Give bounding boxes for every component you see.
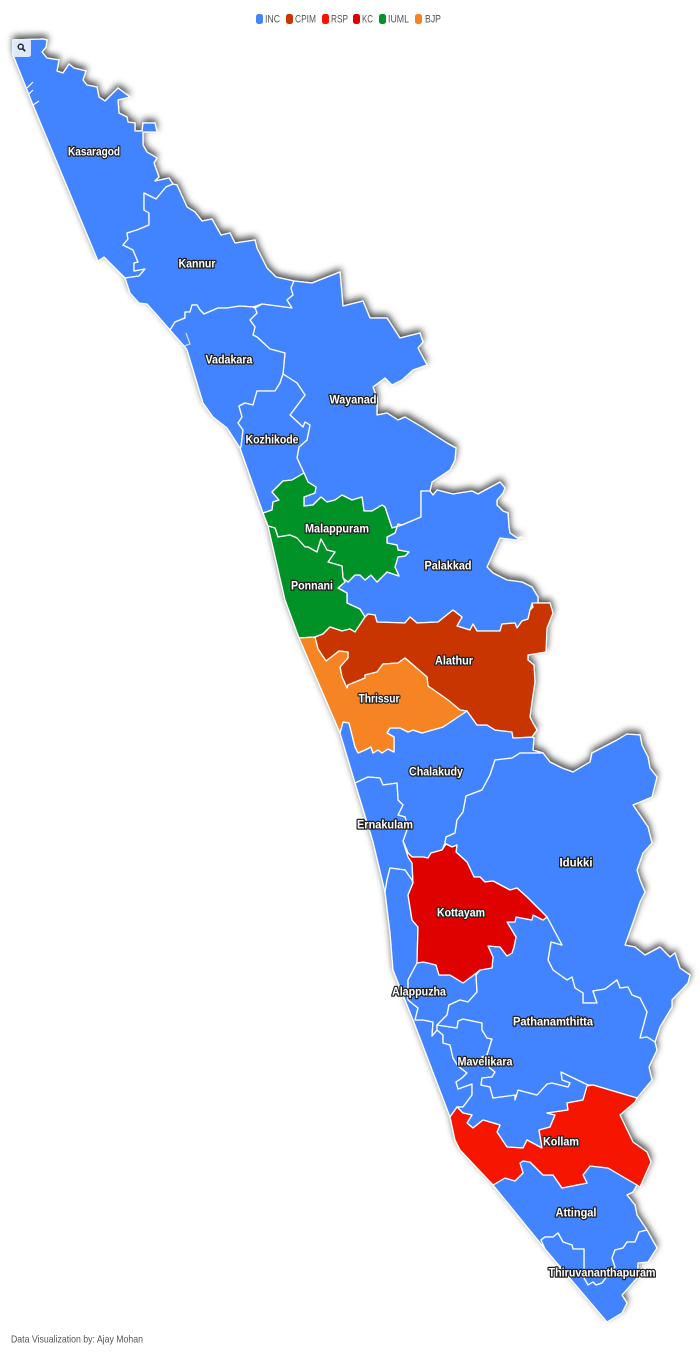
label: Ernakulam: Ernakulam bbox=[357, 820, 413, 832]
label: Palakkad: Palakkad bbox=[424, 561, 472, 573]
label: Alappuzha: Alappuzha bbox=[392, 987, 447, 999]
label: Thiruvananthapuram: Thiruvananthapuram bbox=[548, 1268, 656, 1280]
label: Kozhikode: Kozhikode bbox=[246, 435, 298, 447]
region: Kannur bbox=[123, 184, 294, 330]
label: Ponnani: Ponnani bbox=[291, 581, 333, 593]
label: Kannur: Kannur bbox=[178, 259, 216, 271]
legend item: CPIM: CPIM bbox=[295, 14, 316, 26]
legend item: IUML bbox=[379, 14, 409, 26]
label: Pathanamthitta: Pathanamthitta bbox=[513, 1017, 594, 1029]
legend item: RSP bbox=[322, 14, 348, 26]
constituency labels bbox=[68, 147, 656, 1280]
region: Pathanamthitta bbox=[437, 915, 657, 1100]
region: Thiruvananthapuram bbox=[541, 1230, 657, 1322]
legend item: KC: KC bbox=[362, 14, 373, 26]
legend bbox=[256, 14, 441, 26]
legend item: BJP bbox=[415, 14, 441, 26]
region: Ponnani bbox=[268, 526, 365, 638]
region: Vadakara bbox=[170, 305, 285, 448]
label: Attingal: Attingal bbox=[556, 1208, 596, 1220]
footer credit: Data Visualization by: Ajay Mohan bbox=[11, 1334, 143, 1346]
legend item: CPIM bbox=[286, 14, 316, 26]
label: Kottayam: Kottayam bbox=[437, 908, 485, 920]
region: Idukki bbox=[445, 734, 690, 1042]
legend item: IUML: IUML bbox=[388, 14, 409, 26]
legend item: INC: INC bbox=[265, 14, 280, 26]
region: Thrissur bbox=[299, 637, 467, 753]
label: Idukki: Idukki bbox=[560, 858, 592, 870]
label: Mavelikara: Mavelikara bbox=[458, 1057, 513, 1069]
label: Kasaragod: Kasaragod bbox=[68, 147, 120, 159]
region: Chalakudy bbox=[340, 711, 543, 858]
legend item: BJP: BJP bbox=[425, 14, 441, 26]
icon: zoom button with magnifier bbox=[12, 39, 31, 57]
region: Wayanad bbox=[250, 272, 456, 528]
label: Wayanad: Wayanad bbox=[330, 395, 376, 407]
legend item: INC bbox=[256, 14, 280, 26]
region: Alathur bbox=[315, 603, 553, 738]
region: Palakkad bbox=[338, 482, 538, 631]
region: Kasaragod bbox=[13, 39, 173, 278]
label: Kollam: Kollam bbox=[543, 1137, 579, 1149]
legend item: RSP: RSP bbox=[331, 14, 348, 26]
label: Vadakara: Vadakara bbox=[206, 355, 253, 367]
region: Alappuzha east bbox=[408, 962, 477, 1036]
region: Ernakulam bbox=[355, 777, 413, 892]
region: Kozhikode bbox=[238, 374, 310, 513]
legend item: KC bbox=[353, 14, 373, 26]
region: Malappuram bbox=[263, 473, 409, 582]
label: Alathur: Alathur bbox=[435, 656, 473, 668]
region: Kottayam bbox=[403, 841, 547, 983]
region: Kollam bbox=[450, 1085, 651, 1188]
label: Thrissur: Thrissur bbox=[358, 694, 400, 706]
label: Chalakudy: Chalakudy bbox=[409, 767, 464, 779]
region: Alappuzha bbox=[385, 868, 472, 1117]
region: Attingal bbox=[493, 1161, 647, 1285]
coastal notches bbox=[27, 82, 190, 346]
label: Malappuram: Malappuram bbox=[305, 524, 369, 536]
region: Mavelikara bbox=[437, 1019, 588, 1148]
